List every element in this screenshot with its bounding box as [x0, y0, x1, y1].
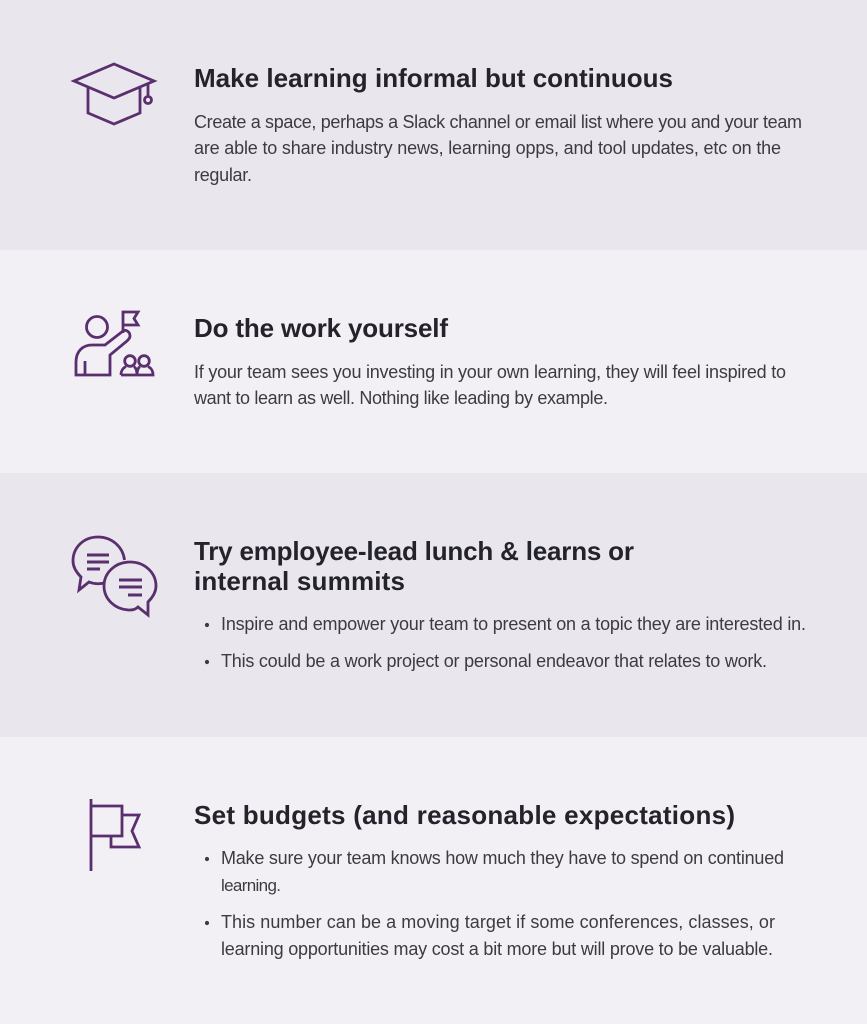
icon: person with flag and team [76, 312, 153, 375]
bullet list: budget details: learning. [221, 876, 281, 895]
panel: set budgets [0, 737, 867, 1024]
panel: make learning informal [0, 0, 867, 250]
text block: investing in your own learning [193, 362, 786, 408]
bullet list: budget details [205, 848, 784, 959]
icon: flag [91, 799, 139, 871]
text block: create a space [194, 112, 802, 185]
heading: do the work yourself: Do the work yourself [194, 313, 448, 343]
text block: investing in your own learning: If your team sees you investing in your own learning, they will feel inspired to [194, 362, 786, 382]
bullet list: budget details: This number can be a moving target if some conferences, classes, or [221, 912, 775, 932]
text block: create a space: are able to share industry news, learning opps, and tool updates, etc on the [194, 138, 781, 158]
bullet list: budget details: Make sure your team knows how much they have to spend on continued [221, 848, 784, 868]
icon: speech bubbles [73, 537, 156, 615]
bullet list: present on a topic [205, 614, 806, 671]
heading: employee-lead lunch and learns: Try employee-lead lunch & learns or [194, 536, 634, 566]
bullet list: present on a topic: This could be a work project or personal endeavor that relates to work. [221, 651, 767, 671]
panel: do the work yourself [0, 250, 867, 473]
heading: employee-lead lunch and learns [194, 536, 634, 596]
heading: employee-lead lunch and learns: internal summits [194, 566, 405, 596]
text block: create a space: regular. [194, 165, 252, 185]
panel: lunch and learns [0, 473, 867, 737]
text block: create a space: Create a space, perhaps a Slack channel or email list where you and your team [194, 112, 802, 132]
text block: investing in your own learning: want to learn as well. Nothing like leading by example. [193, 388, 608, 408]
heading: set budgets: Set budgets (and reasonable expectations) [194, 800, 735, 830]
icon: graduation cap [74, 64, 154, 124]
bullet list: present on a topic: Inspire and empower your team to present on a topic they are interested in. [221, 614, 806, 634]
bullet list: budget details: learning opportunities may cost a bit more but will prove to be valuable. [221, 939, 773, 959]
heading: make learning informal: Make learning informal but continuous [194, 63, 673, 93]
